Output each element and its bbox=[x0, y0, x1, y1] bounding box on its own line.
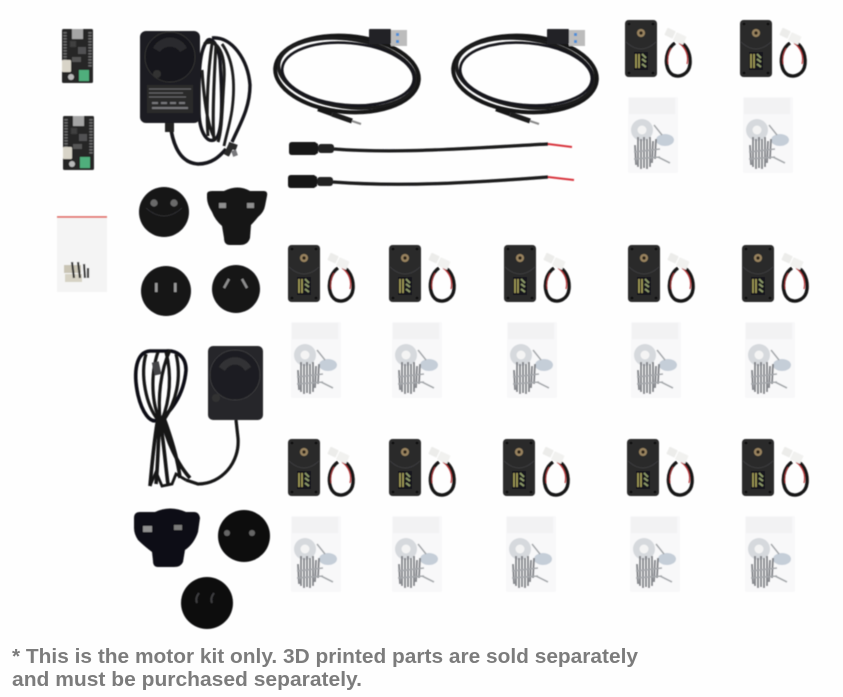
plug: US bbox=[141, 266, 191, 316]
motor set: row 1, column 4 bbox=[625, 20, 690, 173]
control board 1 bbox=[62, 29, 93, 83]
plug: EU, lower set bbox=[218, 510, 270, 562]
USB cable 1 bbox=[272, 29, 422, 124]
DC pigtail cable 2 bbox=[288, 175, 574, 188]
motor set: row 2, column 4 bbox=[628, 245, 693, 398]
motor set: row 2, column 5 bbox=[742, 245, 807, 398]
plug: EU bbox=[139, 187, 189, 237]
small hardware bag bbox=[57, 216, 107, 292]
footnote: and must be purchased separately. bbox=[12, 669, 362, 691]
motor set: row 3, column 1 bbox=[288, 439, 353, 592]
plug: UK bbox=[207, 188, 267, 245]
motor set: row 3, column 3 bbox=[503, 439, 568, 592]
DC pigtail cable 1 bbox=[289, 142, 572, 155]
USB cable 2 bbox=[450, 29, 600, 124]
power adapter, top bbox=[140, 31, 250, 164]
footnote bbox=[12, 646, 639, 691]
plug: US, lower set bbox=[181, 577, 233, 629]
plug: AU bbox=[212, 265, 260, 313]
motor set: row 3, column 5 bbox=[742, 439, 807, 592]
motor set: row 2, column 3 bbox=[504, 245, 569, 398]
motor set: row 3, column 2 bbox=[389, 439, 454, 592]
motor set: row 1, column 5 bbox=[740, 20, 805, 173]
motor set: row 2, column 1 bbox=[288, 245, 353, 398]
motor set: row 2, column 2 bbox=[389, 245, 454, 398]
control board 2 bbox=[63, 116, 94, 170]
motor set: row 3, column 4 bbox=[627, 439, 692, 592]
footnote: * This is the motor kit only. 3D printed parts are sold separately bbox=[12, 646, 639, 668]
power adapter, bottom bbox=[136, 346, 263, 486]
plug: UK, lower set bbox=[134, 508, 200, 567]
